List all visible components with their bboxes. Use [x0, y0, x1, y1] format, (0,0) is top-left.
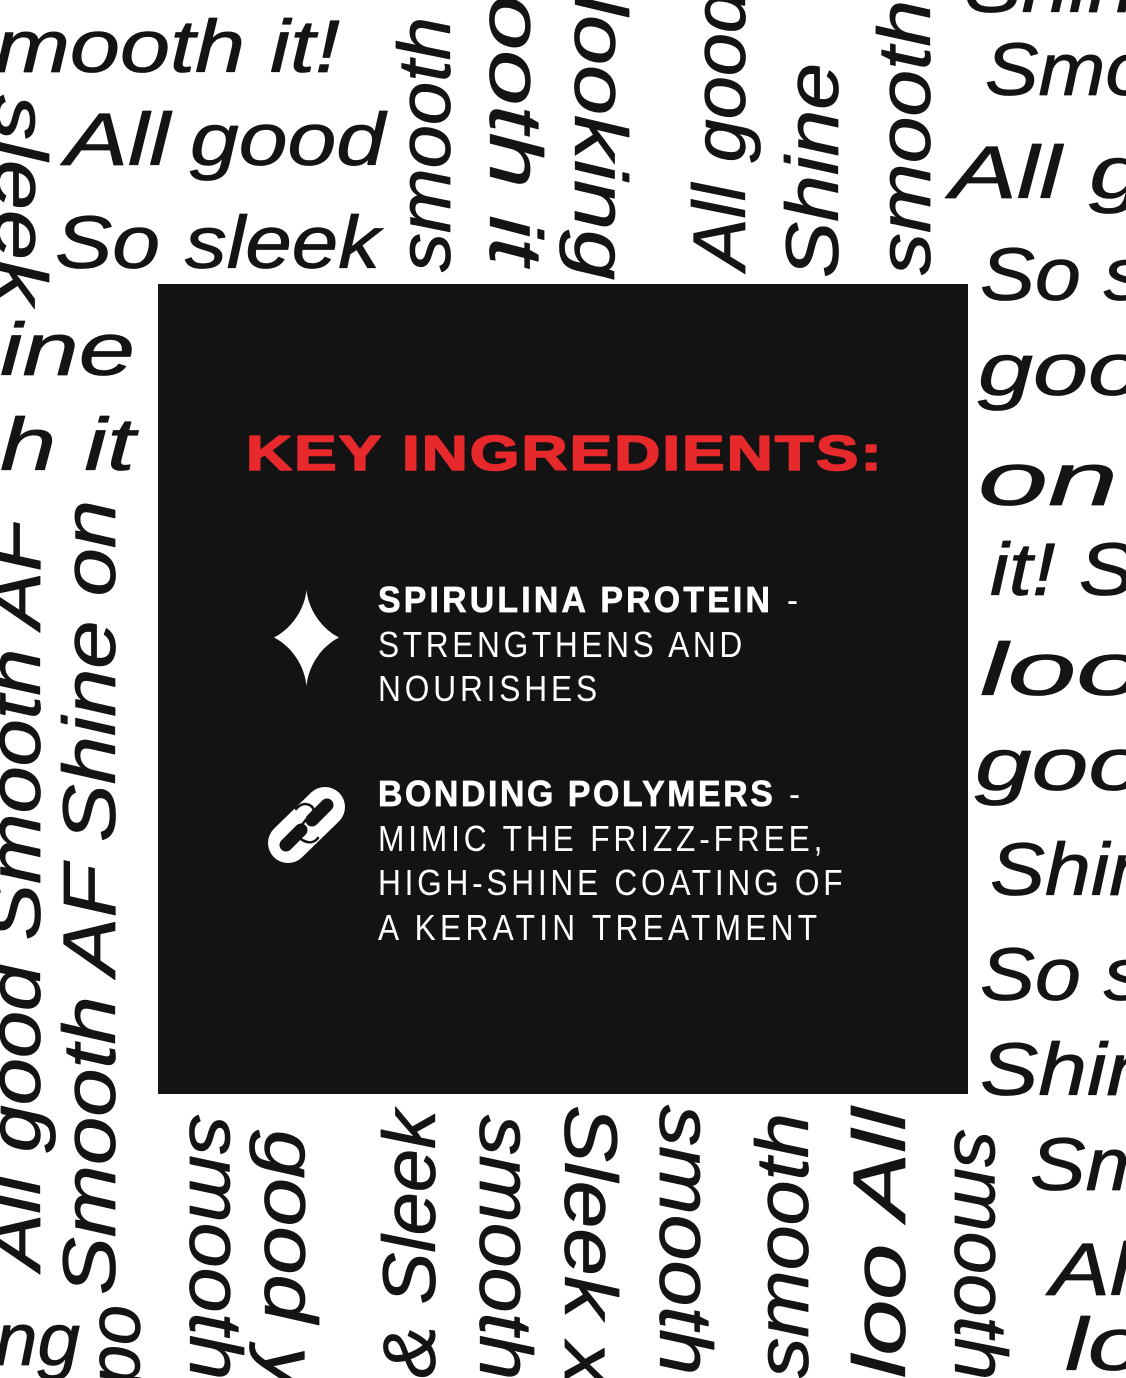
handwritten background pattern: So s: [980, 233, 1126, 316]
handwritten background pattern: mooth it!: [0, 5, 340, 88]
handwritten background pattern: ine: [0, 308, 135, 391]
handwritten background pattern: loo: [980, 628, 1126, 711]
handwritten background pattern: h it: [0, 403, 140, 486]
handwritten background pattern: All: [60, 98, 173, 181]
ingredient: spirulina protein: -: [787, 579, 798, 620]
icon: chain link: [286, 804, 327, 845]
handwritten background pattern: goo: [975, 723, 1126, 806]
handwritten background pattern: smooth: [863, 0, 946, 275]
ingredient: bonding polymers: MIMIC THE FRIZZ-FREE,: [378, 819, 822, 859]
handwritten background pattern: & Sleek: [368, 1106, 451, 1378]
heading: key ingredients: KEY INGREDIENTS:: [246, 427, 882, 481]
handwritten background pattern: on: [978, 438, 1118, 521]
handwritten background pattern: it! S: [990, 528, 1126, 611]
ingredient: bonding polymers: HIGH-SHINE COATING OF: [378, 863, 843, 903]
handwritten background pattern: All g: [945, 131, 1126, 214]
handwritten background pattern: ooth it: [474, 0, 557, 270]
handwritten background pattern: Shine: [771, 63, 854, 278]
handwritten background pattern: smooth: [383, 17, 466, 272]
ingredient: spirulina protein: SPIRULINA PROTEIN: [378, 580, 770, 620]
handwritten background pattern: good y: [249, 1130, 332, 1378]
handwritten background pattern: All good: [678, 0, 761, 274]
handwritten background pattern: good: [190, 98, 388, 181]
handwritten background pattern: smooth: [939, 1130, 1022, 1378]
handwritten background pattern: Shin: [980, 1028, 1126, 1111]
handwritten background pattern: loo All: [838, 1105, 921, 1378]
handwritten background pattern: looking: [559, 0, 642, 280]
handwritten background pattern: Sleek x: [549, 1105, 632, 1378]
handwritten background pattern: smooth: [174, 1115, 257, 1378]
panel: key ingredients: [158, 284, 968, 1094]
ingredient: bonding polymers: [378, 773, 843, 948]
handwritten background pattern: So s: [980, 933, 1126, 1016]
ingredient: bonding polymers: A KERATIN TREATMENT: [378, 908, 817, 948]
ingredient: spirulina protein: STRENGTHENS AND: [378, 625, 742, 665]
ingredient: spirulina protein: [378, 579, 798, 709]
handwritten background pattern: So: [55, 201, 160, 284]
handwritten background pattern: sleek: [185, 201, 384, 284]
handwritten background pattern: smooth: [644, 1105, 727, 1375]
handwritten background pattern: smooth: [464, 1115, 547, 1378]
ingredient: bonding polymers: BONDING POLYMERS: [378, 774, 773, 814]
handwritten background pattern: goo: [978, 328, 1126, 411]
ingredient: bonding polymers: -: [789, 773, 800, 814]
icon: sparkle: [274, 590, 339, 686]
handwritten background pattern: Smooth AF Shine on: [48, 500, 131, 1295]
ingredient: spirulina protein: NOURISHES: [378, 669, 597, 709]
handwritten background pattern: smooth: [741, 1113, 824, 1378]
